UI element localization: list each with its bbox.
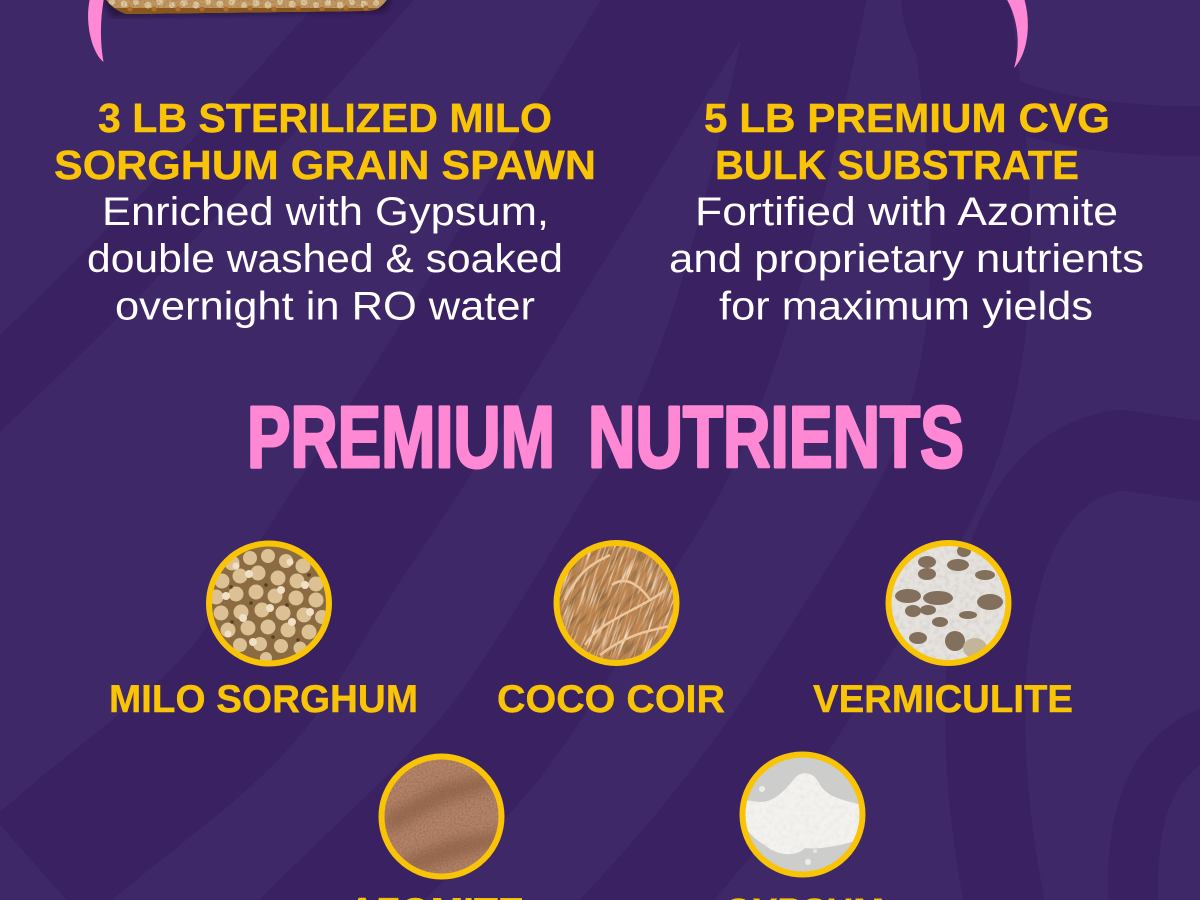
text block: bulk substrate — [669, 95, 1144, 328]
text block: grain spawn: SORGHUM GRAIN SPAWN — [54, 142, 596, 188]
text block: grain spawn: double washed & soaked — [87, 237, 563, 281]
text block: grain spawn: Enriched with Gypsum, — [102, 190, 549, 234]
label: coco coir: COCO COIR — [497, 678, 725, 721]
text block: bulk substrate: Fortified with Azomite — [695, 190, 1118, 234]
left pink bracket — [88, 0, 104, 62]
text block: grain spawn — [54, 95, 596, 328]
text block: grain spawn: overnight in RO water — [115, 284, 535, 328]
text block: bulk substrate: and proprietary nutrients — [669, 237, 1144, 281]
label: milo sorghum: MILO SORGHUM — [109, 678, 418, 721]
text block: bulk substrate: 5 LB PREMIUM CVG — [704, 95, 1110, 141]
heading: premium nutrients: PREMIUM — [247, 389, 555, 486]
icon: vermiculite — [885, 540, 1012, 667]
product photo: grain spawn bag — [100, 0, 395, 17]
icon: coco coir — [554, 540, 680, 666]
label: vermiculite: VERMICULITE — [813, 678, 1073, 721]
text block: bulk substrate: for maximum yields — [719, 284, 1093, 328]
text block: grain spawn: 3 LB STERILIZED MILO — [98, 95, 552, 141]
icon: milo sorghum — [206, 541, 332, 667]
text block: bulk substrate: BULK SUBSTRATE — [715, 142, 1079, 188]
icon: azomite — [378, 753, 505, 880]
heading: premium nutrients — [247, 389, 964, 486]
right pink bracket — [1006, 0, 1028, 68]
icon: gypsum — [739, 751, 866, 878]
heading: premium nutrients: NUTRIENTS — [588, 389, 964, 486]
